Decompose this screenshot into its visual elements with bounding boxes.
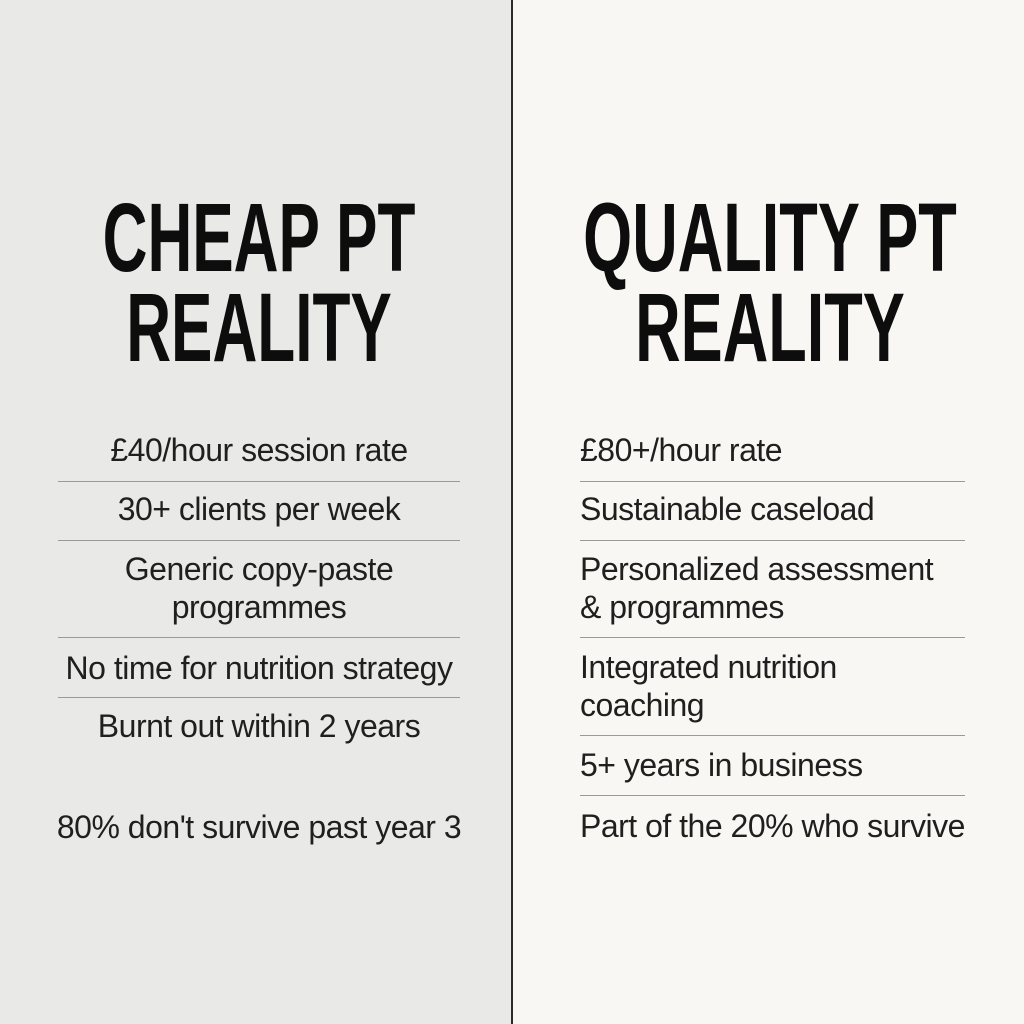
panel: cheap PT [0,0,512,1024]
item: rate: £80+/hour rate [580,432,782,468]
list: quality PT [580,432,965,844]
item: years: 5+ years in business [580,747,863,783]
panel: quality PT [513,0,1024,1024]
item: nutrition: No time for nutrition strategy [66,650,452,686]
item: survival: 80% don't survive past year 3 [57,809,461,845]
item: assessment [580,551,934,625]
title: cheap PT reality [103,183,415,382]
item: assessment: & programmes [580,589,784,625]
title: cheap PT reality: REALITY [126,273,392,382]
item: nutrition: Integrated nutrition [580,649,837,685]
item: programmes: Generic copy-paste [125,551,393,587]
title: cheap PT reality: CHEAP PT [103,183,415,292]
item: assessment: Personalized assessment [580,551,933,587]
title: quality PT reality: QUALITY PT [583,183,957,292]
item: nutrition [580,649,837,723]
item: rate: £40/hour session rate [110,432,408,468]
title: quality PT reality [583,183,957,382]
item: programmes [125,551,393,625]
item: survivors: Part of the 20% who survive [580,808,965,844]
item: nutrition: coaching [580,687,704,723]
list: cheap PT [57,432,461,845]
item: burnout: Burnt out within 2 years [98,708,420,744]
item: caseload: Sustainable caseload [580,491,874,527]
item: programmes: programmes [172,589,346,625]
title: quality PT reality: REALITY [635,273,905,382]
item: clients: 30+ clients per week [118,491,400,527]
